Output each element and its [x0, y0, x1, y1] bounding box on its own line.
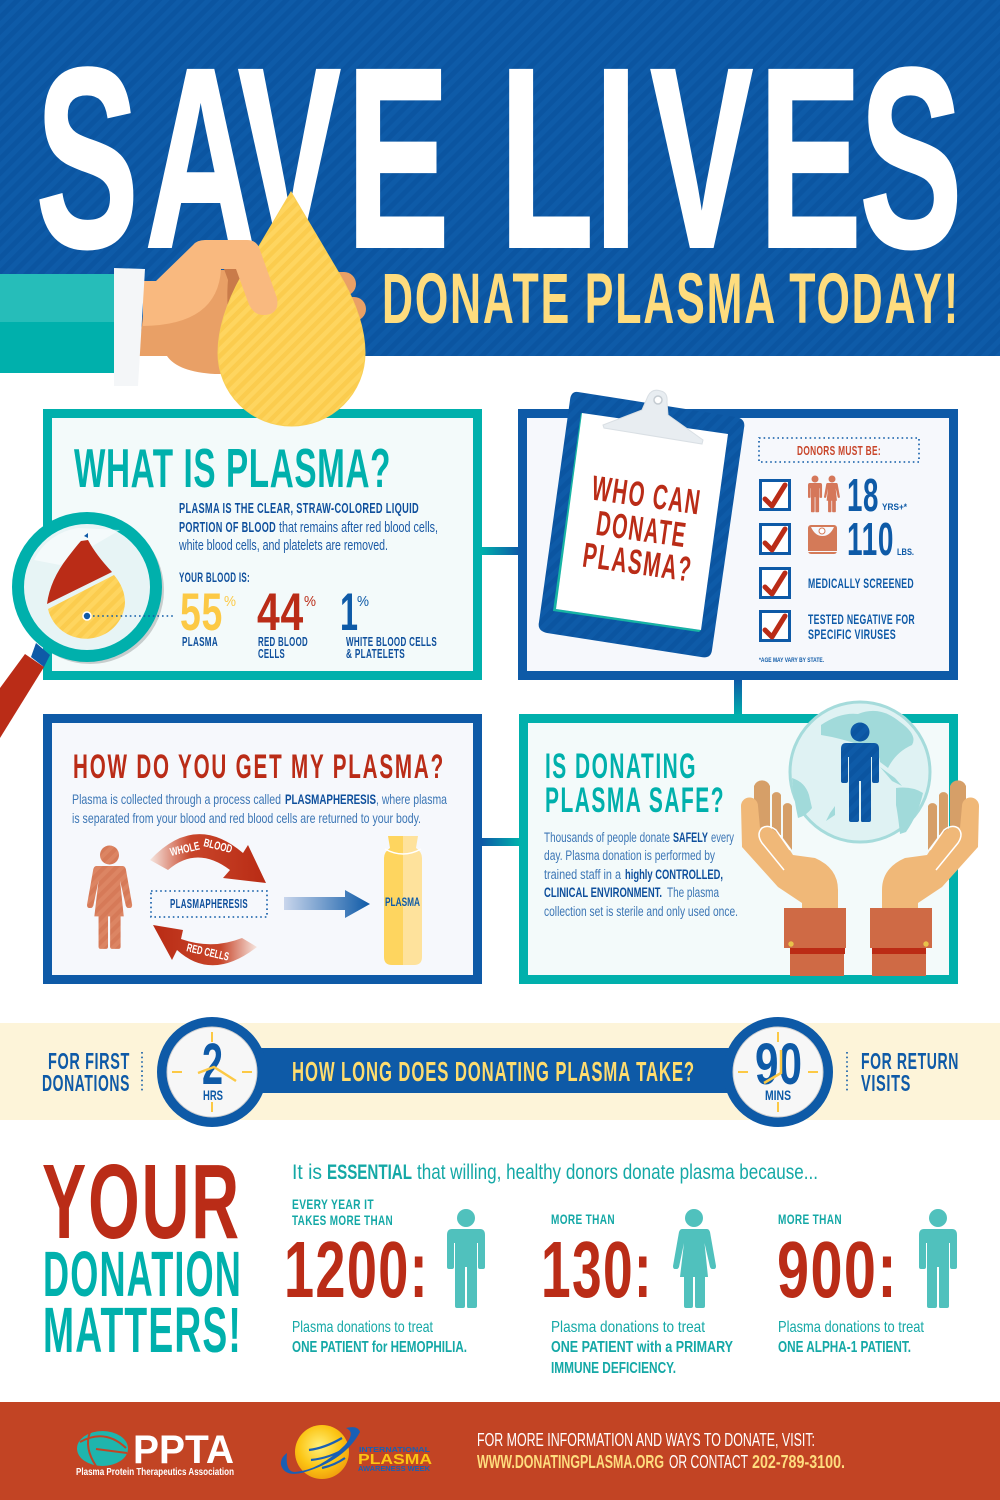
checkbox: medically screened: MEDICALLY SCREENED [808, 575, 914, 591]
heading: your donation matters [42, 1143, 242, 1366]
stat: 1 percent white blood cells and platelets: & PLATELETS [346, 646, 405, 661]
text block: contact information [477, 1430, 845, 1472]
text block: contact information: 202-789-3100. [752, 1452, 845, 1472]
stat: 44 percent red blood cells: % [304, 593, 316, 610]
panel: how do you get my plasma [48, 718, 478, 980]
panel: who can donate plasma [522, 390, 954, 676]
text block: safety: CLINICAL ENVIRONMENT. [544, 885, 662, 900]
text block: plasmapheresis explanation [72, 791, 447, 826]
heading: your donation matters: MATTERS! [43, 1294, 242, 1366]
stat: 1200 donations hemophilia: ONE PATIENT for HEMOPHILIA. [292, 1339, 467, 1356]
stat: 1200 donations hemophilia: 1200: [284, 1225, 429, 1314]
text block: definition: that remains after red blood cells, [279, 520, 438, 536]
stat: 1200 donations hemophilia [284, 1196, 485, 1356]
illustration: hand holding plasma drop [0, 192, 366, 426]
text block: contact information: WWW.DONATINGPLASMA.ORG [477, 1452, 664, 1472]
stat: 44 percent red blood cells: 44 [257, 583, 304, 642]
connector lines [482, 547, 742, 846]
stat: 130 donations immune deficiency: ONE PATIENT with a PRIMARY [551, 1339, 733, 1356]
icon: clipboard [539, 390, 744, 657]
icon: blue person [841, 722, 879, 822]
checkbox: weight [760, 524, 790, 554]
band: how long does donating take [0, 1022, 1000, 1122]
stat: 1200 donations hemophilia: EVERY YEAR IT [292, 1196, 374, 1212]
logo: PPTA: PPTA [133, 1428, 234, 1472]
stat: 1200 donations hemophilia: Plasma donations to treat [292, 1319, 433, 1336]
heading: HOW DO YOU GET MY PLASMA? [73, 748, 445, 786]
text block: definition: white blood cells, and platelets are removed. [178, 538, 388, 554]
icon: clock 90 minutes: 90 [755, 1032, 802, 1097]
text block: safety: The plasma [667, 885, 719, 900]
icon: magnifying glass with blood composition drop [0, 516, 175, 738]
icon: left hand [741, 780, 846, 976]
arrow: whole blood: WHOLE [169, 840, 201, 859]
text block: essential statement: ESSENTIAL [327, 1161, 412, 1184]
stat: 900 donations alpha-1: 900: [777, 1225, 898, 1314]
stat: 110 lbs: 110 [847, 513, 894, 565]
footer [0, 1402, 1000, 1500]
stat: 55 percent plasma: PLASMA [182, 634, 218, 649]
label: for first donations: DONATIONS [42, 1070, 130, 1096]
checkbox: tested negative: SPECIFIC VIRUSES [808, 626, 896, 642]
checkbox: tested negative: TESTED NEGATIVE FOR [808, 611, 915, 627]
icon: shirt cuff [114, 268, 145, 386]
icon: teal man [447, 1209, 485, 1308]
heading: IS DONATING [545, 747, 697, 786]
arrow: whole blood [150, 834, 266, 883]
icon: globe with person [790, 702, 930, 842]
title: save lives: SAVE LIVES [36, 15, 962, 301]
text block: safety: trained staff in a [544, 867, 621, 882]
banner: question: HOW LONG DOES DONATING PLASMA TAKE? [292, 1056, 695, 1087]
stat: 130 donations immune deficiency: MORE THAN [551, 1211, 615, 1227]
callout: plasmapheresis: PLASMAPHERESIS [170, 897, 248, 911]
logo: international plasma awareness week: AWARENESS WEEK [358, 1464, 431, 1473]
heading: your donation matters: YOUR [42, 1143, 241, 1261]
logo: international plasma awareness week: PLASMA [358, 1451, 432, 1468]
callout: donors must be: DONORS MUST BE: [797, 443, 881, 458]
checkbox: medically screened [760, 568, 914, 598]
icon: clock 90 minutes [728, 1022, 828, 1122]
text block: safety: day. Plasma donation is performed by [544, 848, 715, 863]
stat: 1 percent white blood cells and platelets [340, 583, 437, 661]
text block: safety: every [711, 830, 734, 845]
text block: definition: PLASMA IS THE CLEAR, STRAW-COLORED LIQUID [179, 501, 419, 517]
logo: international plasma awareness week: INTERNATIONAL [359, 1445, 430, 1454]
label: for return visits [847, 1048, 959, 1096]
label: for return visits: VISITS [861, 1070, 911, 1096]
text block: plasmapheresis explanation: , where plasma [376, 791, 447, 807]
header banner [0, 0, 1000, 356]
heading: WHAT IS PLASMA? [74, 437, 391, 499]
stat: 900 donations alpha-1: MORE THAN [778, 1211, 842, 1227]
panel: is donating plasma safe [524, 702, 979, 980]
stat: 900 donations alpha-1: ONE ALPHA-1 PATIENT. [778, 1339, 911, 1356]
stat: 18 years plus: 18 [847, 469, 879, 521]
icon: plasma drop [218, 192, 365, 426]
stat: 900 donations alpha-1 [777, 1209, 957, 1356]
callout: donors must be [759, 438, 919, 462]
logo: PPTA: Plasma Protein Therapeutics Association [76, 1467, 234, 1478]
icon: woman donor [87, 846, 132, 949]
icon: plasma bottle [384, 836, 422, 965]
callout: plasmapheresis [151, 891, 267, 917]
text block: contact information: FOR MORE INFORMATION AND WAYS TO DONATE, VISIT: [477, 1430, 815, 1450]
stat: 130 donations immune deficiency: IMMUNE DEFICIENCY. [551, 1360, 676, 1377]
icon: right hand [870, 780, 979, 976]
icon: teal sleeve [0, 274, 115, 373]
heading: who can donate plasma: WHO CAN [589, 469, 704, 523]
heading: PLASMA SAFE? [545, 781, 725, 820]
icon: clock 90 minutes: MINS [765, 1087, 791, 1103]
heading: who can donate plasma [580, 469, 704, 590]
stat: 18 years plus: YRS+* [882, 502, 907, 513]
checkbox: age [760, 480, 790, 510]
icon: teal man [919, 1209, 957, 1308]
stat: 110 lbs: LBS. [897, 547, 914, 558]
icon: clock 2 hours [162, 1022, 262, 1122]
text block: safety: SAFELY [673, 830, 708, 845]
text block: plasmapheresis explanation: PLASMAPHERESIS [285, 791, 376, 807]
icon: thumb and palm [143, 240, 277, 326]
text block: safety: highly CONTROLLED, [625, 867, 723, 882]
stat: 55 percent plasma: % [224, 593, 236, 610]
stat: 130 donations immune deficiency [541, 1209, 733, 1377]
stat: 1 percent white blood cells and platelets: WHITE BLOOD CELLS [346, 634, 437, 649]
text block: essential statement [292, 1161, 818, 1184]
label: for first donations: FOR FIRST [48, 1048, 130, 1074]
stat: 1200 donations hemophilia: TAKES MORE THAN [292, 1212, 393, 1228]
arrow: red cells: RED CELLS [185, 942, 230, 964]
text block: safety: Thousands of people donate [544, 830, 670, 845]
arrow: red cells [153, 925, 257, 965]
icon: plasma bottle: PLASMA [385, 895, 420, 909]
icon: clock 2 hours: 2 [202, 1032, 223, 1097]
icon: hand behind drop [138, 269, 366, 374]
icon: teal woman [673, 1209, 716, 1308]
stat: 44 percent red blood cells: CELLS [258, 646, 285, 661]
stat: 130 donations immune deficiency: Plasma donations to treat [551, 1319, 705, 1336]
icon: man and woman [808, 476, 840, 512]
footnote: *AGE MAY VARY BY STATE. [759, 658, 824, 664]
heading: your donation matters: DONATION [43, 1238, 242, 1310]
heading: who can donate plasma: DONATE [594, 504, 689, 555]
logo: international plasma awareness week [281, 1425, 432, 1479]
stat: 1 percent white blood cells and platelets: % [357, 593, 369, 610]
text block: plasmapheresis explanation: Plasma is collected through a process called [72, 791, 281, 807]
text block: definition [178, 501, 438, 554]
text block: contact information: OR CONTACT [669, 1452, 748, 1472]
stat: 1 percent white blood cells and platelets: 1 [340, 583, 358, 642]
banner: question [255, 1048, 735, 1093]
heading [545, 747, 725, 820]
icon: scale [808, 525, 837, 554]
text block: essential statement: that willing, healthy donors donate plasma because... [417, 1161, 818, 1184]
stat: 44 percent red blood cells: RED BLOOD [258, 634, 308, 649]
stat: 55 percent plasma: 55 [180, 583, 223, 642]
text block: safety [544, 830, 738, 919]
heading: who can donate plasma: PLASMA? [580, 536, 695, 590]
arrow: to plasma bottle [284, 890, 370, 918]
icon: clock 2 hours: HRS [203, 1087, 223, 1103]
text block: plasmapheresis explanation: is separated from your blood and red blood cells are returned to your body. [72, 810, 421, 826]
stat: 130 donations immune deficiency: 130: [541, 1225, 653, 1314]
label: for first donations [42, 1048, 142, 1096]
logo: PPTA [76, 1428, 234, 1478]
text block: essential statement: It is [292, 1161, 322, 1184]
panel: what is plasma [48, 414, 478, 676]
text block: safety: collection set is sterile and only used once. [544, 904, 738, 919]
checkbox: tested negative [760, 611, 915, 642]
label: your blood is: YOUR BLOOD IS: [179, 570, 250, 585]
arrow: whole blood: BLOOD [202, 837, 233, 856]
stat: 900 donations alpha-1: Plasma donations to treat [778, 1319, 924, 1336]
text block: definition: PORTION OF BLOOD [179, 520, 276, 536]
